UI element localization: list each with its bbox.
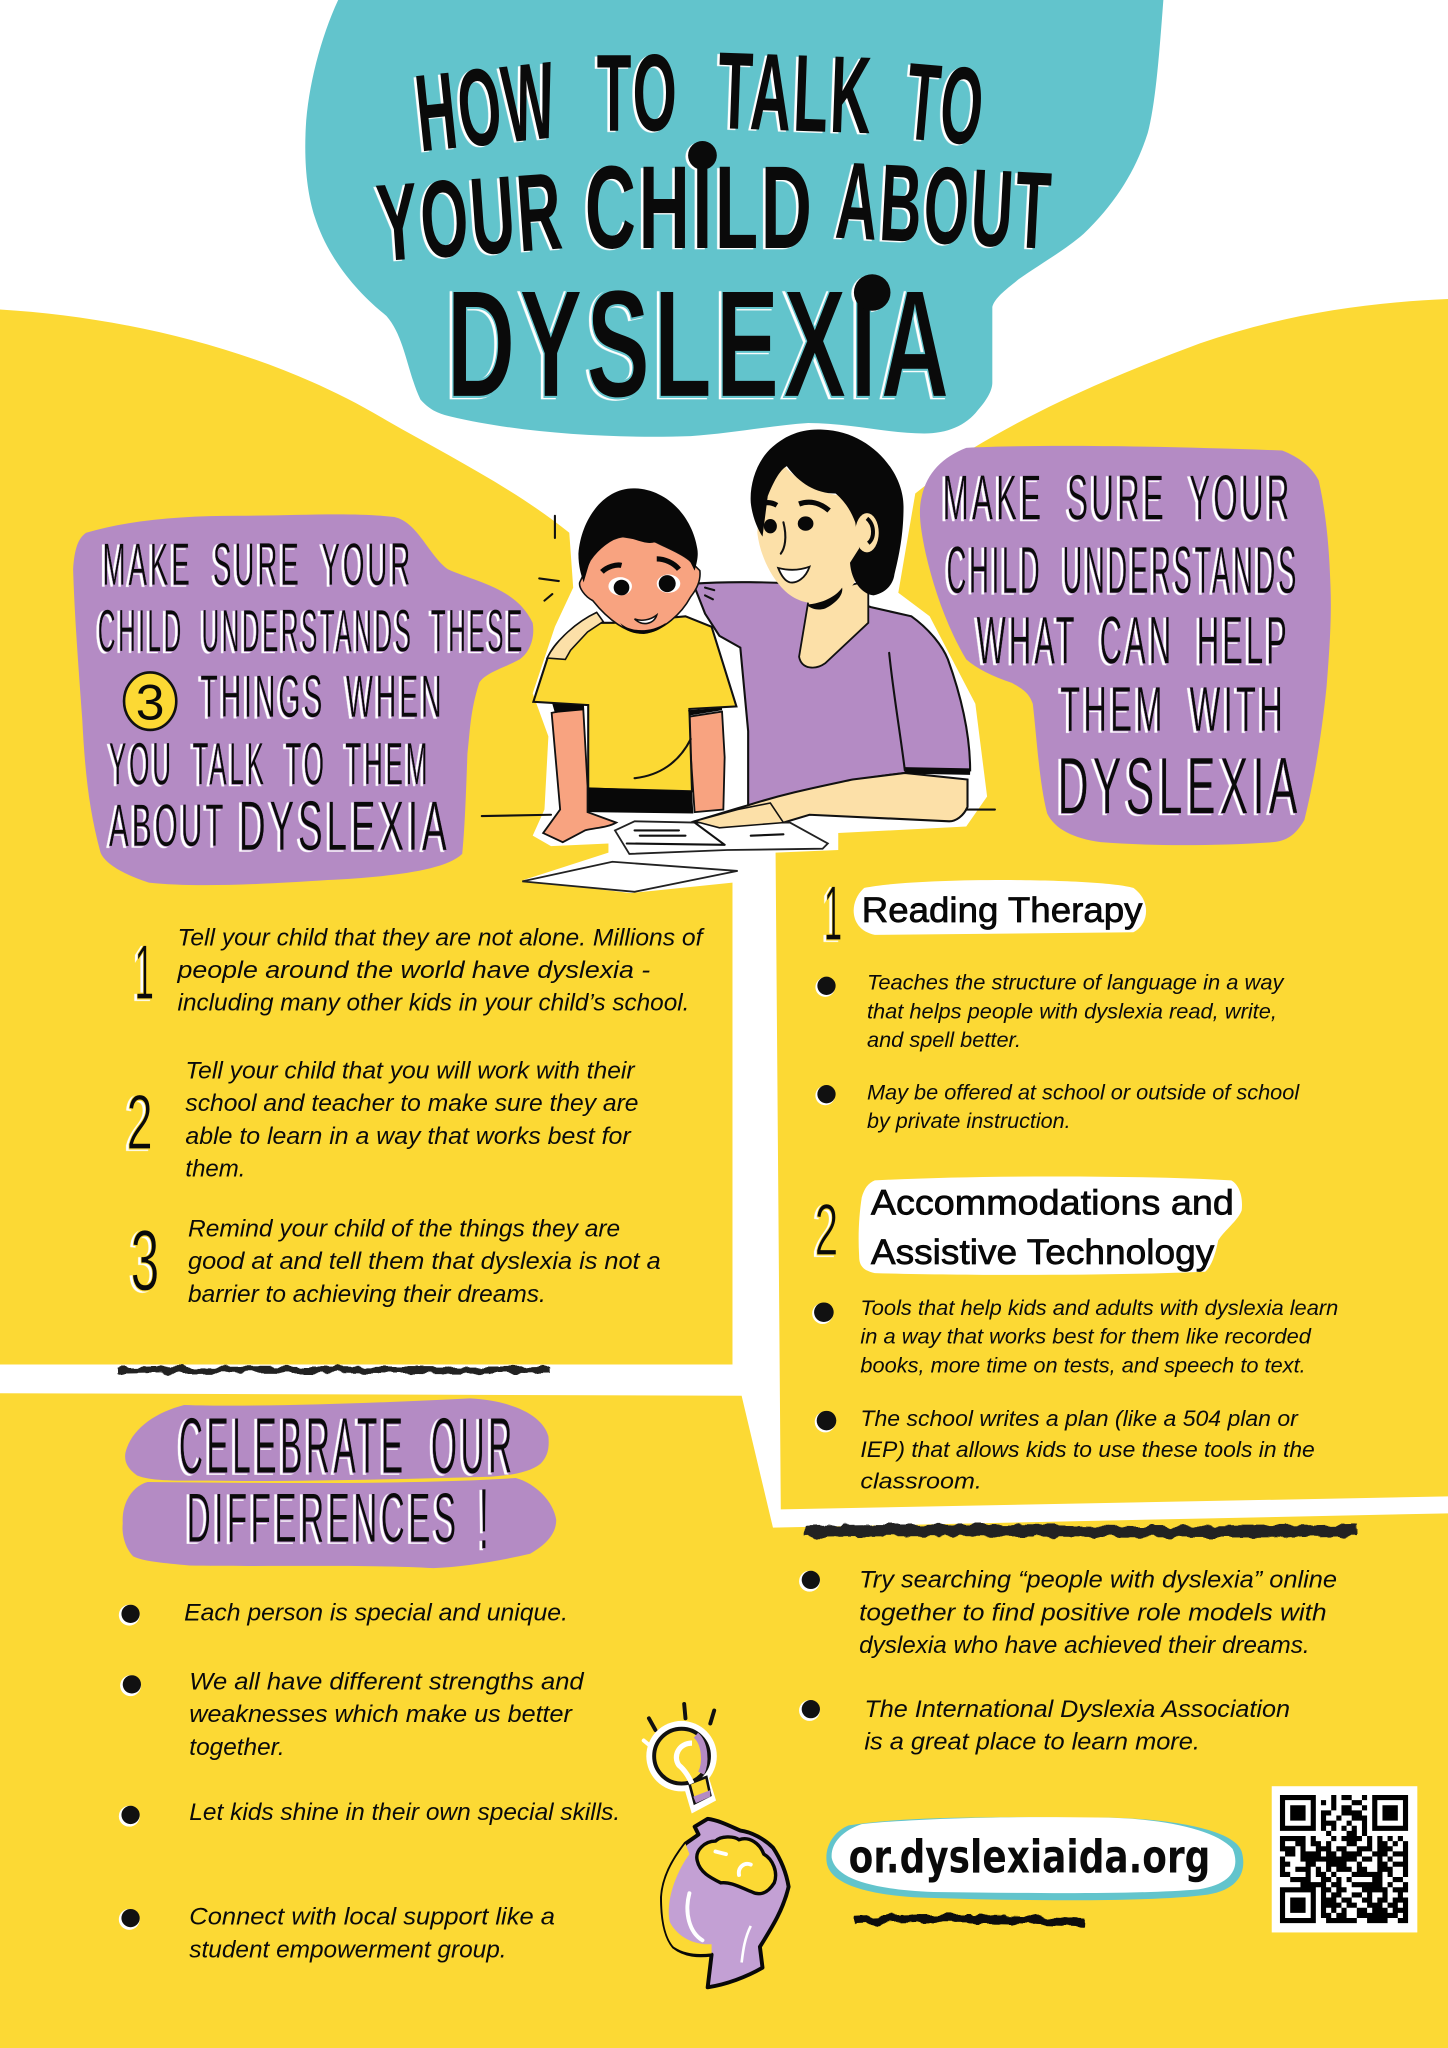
child features bbox=[539, 516, 714, 634]
parent features bbox=[757, 502, 842, 610]
reading therapy text 2: May be offered at school or outside of school bbox=[867, 1081, 1301, 1104]
title blob bbox=[305, 0, 1163, 437]
right section: reading therapy: 1 bbox=[824, 869, 842, 957]
panel: left yellow background bbox=[0, 309, 732, 1364]
right bubble heading bbox=[943, 462, 1302, 831]
celebrate list bbox=[119, 1599, 620, 1963]
left bubble heading: DYSLEXIA bbox=[239, 786, 450, 865]
pill: accommodations: Accommodations and bbox=[871, 1183, 1234, 1222]
title: TO bbox=[597, 33, 679, 155]
item 2 bbox=[127, 1058, 638, 1182]
book bbox=[615, 821, 828, 854]
left bubble heading bbox=[98, 531, 525, 865]
bullet bbox=[119, 1909, 140, 1930]
right section: reading therapy bbox=[815, 869, 1301, 1133]
title: TO bbox=[901, 41, 990, 169]
left bubble heading: YOU TALK TO THEM bbox=[109, 731, 430, 798]
bubble top bbox=[125, 1398, 549, 1481]
right section: accommodations bbox=[812, 1176, 1338, 1494]
item 2: school and teacher to make sure they are bbox=[185, 1090, 638, 1117]
reading therapy text 1: Teaches the structure of language in a way bbox=[867, 972, 1285, 995]
title: ABOUT bbox=[833, 140, 1056, 273]
item 2: Tell your child that you will work with their bbox=[185, 1058, 636, 1085]
left bubble heading: MAKE SURE YOUR bbox=[102, 531, 413, 598]
icon: lightbulb bbox=[644, 1704, 717, 1810]
child face bbox=[580, 537, 700, 633]
accommodations text 2: classroom. bbox=[860, 1469, 982, 1494]
item: Each person is special and unique. bbox=[184, 1599, 568, 1626]
item: weaknesses which make us better bbox=[189, 1701, 573, 1728]
child arms bbox=[543, 706, 616, 842]
reading therapy text 2: by private instruction. bbox=[867, 1110, 1071, 1133]
pill: reading therapy bbox=[854, 880, 1146, 935]
bullet bbox=[799, 1700, 820, 1721]
resources list bbox=[799, 1567, 1337, 1756]
celebrate text: ! bbox=[479, 1472, 492, 1568]
accommodations text 2: The school writes a plan (like a 504 plan or bbox=[860, 1406, 1300, 1431]
bullet bbox=[119, 1806, 140, 1827]
parent hand on shoulder bbox=[547, 612, 603, 659]
bullet bbox=[119, 1605, 140, 1626]
title: YOUR bbox=[373, 150, 568, 285]
number 3 badge bbox=[124, 672, 176, 730]
title bbox=[373, 30, 1056, 430]
QR code bbox=[1272, 1786, 1417, 1932]
item: Let kids shine in their own special skills. bbox=[189, 1799, 620, 1826]
item bbox=[859, 1567, 1337, 1659]
item: together to find positive role models with bbox=[859, 1599, 1327, 1626]
pill: reading therapy: Reading Therapy bbox=[862, 891, 1143, 930]
parent hand bbox=[695, 803, 783, 828]
left bubble heading: ABOUT bbox=[109, 792, 227, 859]
pill: accommodations: Assistive Technology bbox=[871, 1233, 1215, 1272]
child hair bbox=[578, 488, 698, 582]
icon: head with brain bbox=[662, 1819, 789, 1987]
text: CHILD UNDERSTANDS THESE bbox=[98, 598, 525, 665]
bullet bbox=[815, 1085, 836, 1105]
item 2: them. bbox=[185, 1155, 245, 1182]
number 3 badge: 3 bbox=[136, 674, 165, 730]
item bbox=[189, 1904, 555, 1963]
title: TALK bbox=[716, 30, 876, 157]
parent body bbox=[693, 582, 970, 807]
item 3: Remind your child of the things they are bbox=[188, 1216, 620, 1243]
parent face bbox=[757, 466, 867, 603]
table lines bbox=[482, 810, 995, 816]
left bubble heading: THINGS WHEN bbox=[200, 663, 445, 730]
right bubble bbox=[920, 446, 1331, 845]
reading therapy text 2 bbox=[867, 1081, 1301, 1133]
item: together. bbox=[189, 1734, 285, 1761]
celebrate text: DIFFERENCES bbox=[187, 1478, 460, 1557]
title: CHILD bbox=[585, 142, 815, 273]
item 1: Tell your child that they are not alone. Millions of bbox=[178, 924, 705, 951]
illustration: parent and child bbox=[482, 429, 995, 892]
title: HOW bbox=[410, 39, 563, 175]
panel: lower yellow background bbox=[0, 1393, 1448, 2048]
item 3: barrier to achieving their dreams. bbox=[188, 1281, 546, 1308]
bullet bbox=[120, 1675, 141, 1696]
child sleeve shadows bbox=[552, 704, 722, 716]
title: DYSLEXIA bbox=[447, 258, 953, 430]
number 2: 2 bbox=[815, 1190, 838, 1271]
left bubble bbox=[73, 514, 533, 885]
item: Try searching “people with dyslexia” online bbox=[859, 1567, 1337, 1594]
left list: three things bbox=[127, 924, 705, 1309]
panel: right yellow background bbox=[776, 299, 1448, 1509]
accommodations text 1 bbox=[860, 1297, 1338, 1377]
accommodations text 1: books, more time on tests, and speech to text. bbox=[860, 1354, 1306, 1377]
reading therapy text 1: that helps people with dyslexia read, write, bbox=[867, 1000, 1277, 1023]
item 1: including many other kids in your child’s school. bbox=[178, 990, 689, 1017]
item: Connect with local support like a bbox=[189, 1904, 555, 1931]
item: is a great place to learn more. bbox=[864, 1729, 1200, 1756]
item: student empowerment group. bbox=[189, 1936, 507, 1963]
item bbox=[189, 1669, 585, 1761]
text: CELEBRATE OUR bbox=[179, 1401, 516, 1490]
pill white bbox=[832, 1817, 1235, 1893]
parent hair bbox=[751, 429, 904, 595]
item 1: 1 bbox=[134, 928, 154, 1016]
bubble bottom bbox=[122, 1478, 556, 1568]
accommodations text 1: in a way that works best for them like recorded bbox=[860, 1326, 1312, 1349]
bullet bbox=[812, 1302, 834, 1324]
bullet bbox=[799, 1571, 820, 1592]
item 3: good at and tell them that dyslexia is not a bbox=[188, 1248, 661, 1275]
item 3: 3 bbox=[131, 1213, 159, 1309]
website pill bbox=[826, 1817, 1243, 1900]
item 1 bbox=[134, 924, 705, 1017]
celebrate heading bbox=[122, 1398, 556, 1568]
parent ear bbox=[855, 513, 879, 552]
pill: accommodations bbox=[859, 1176, 1242, 1275]
item 2: able to learn in a way that works best for bbox=[185, 1123, 632, 1150]
loose paper bbox=[522, 862, 738, 892]
parent arm bbox=[695, 773, 968, 828]
child shirt bbox=[533, 616, 736, 791]
item: We all have different strengths and bbox=[189, 1669, 585, 1696]
celebrate text bbox=[179, 1401, 516, 1568]
accommodations text 2 bbox=[860, 1406, 1315, 1494]
parent sleeve cuff bbox=[905, 770, 970, 772]
website text: or.dyslexiaida.org bbox=[849, 1830, 1210, 1883]
accommodations text 2: IEP) that allows kids to use these tools in the bbox=[860, 1437, 1315, 1462]
pill teal outline bbox=[826, 1817, 1243, 1900]
item 2: 2 bbox=[127, 1078, 153, 1166]
bullet bbox=[815, 977, 836, 997]
item bbox=[864, 1696, 1290, 1756]
item: The International Dyslexia Association bbox=[864, 1696, 1290, 1723]
accommodations text 1: Tools that help kids and adults with dyslexia learn bbox=[860, 1297, 1338, 1320]
parent neck bbox=[799, 581, 868, 668]
reading therapy text 1: and spell better. bbox=[867, 1029, 1021, 1052]
reading therapy text 1 bbox=[867, 972, 1285, 1052]
bullet bbox=[815, 1411, 836, 1432]
item 3 bbox=[131, 1213, 661, 1309]
item: dyslexia who have achieved their dreams. bbox=[859, 1632, 1310, 1659]
child waistband bbox=[588, 787, 693, 813]
item 1: people around the world have dyslexia - bbox=[176, 957, 650, 984]
